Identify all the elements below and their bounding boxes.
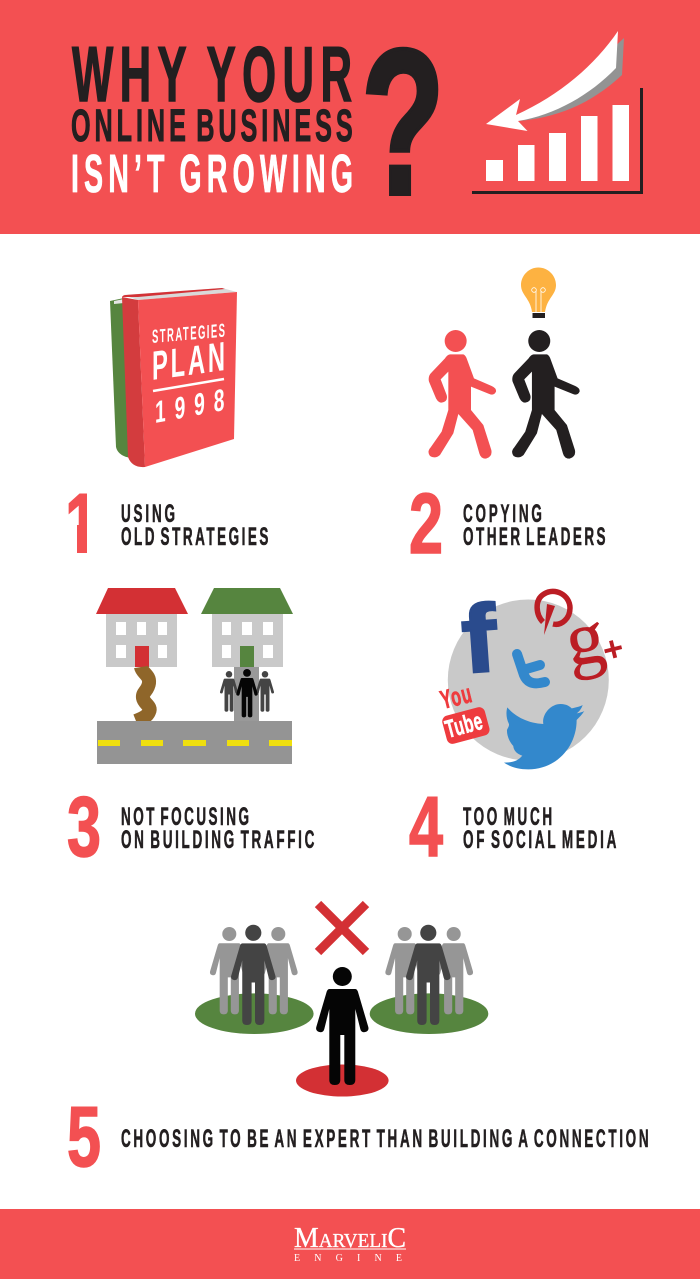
label 3 — [121, 804, 314, 854]
title: ISN’T GROWING — [71, 145, 353, 204]
icon: google plus: + — [599, 628, 628, 671]
left green group — [195, 925, 314, 1034]
icon: twitter bird — [504, 704, 584, 769]
brown winding path — [136, 667, 150, 721]
panel: item 2 copying leaders — [409, 268, 606, 571]
label 2 — [463, 501, 606, 551]
number 1: 1 — [65, 476, 99, 571]
label 1: USING — [121, 501, 175, 528]
lone expert on red disc — [296, 967, 389, 1096]
icon: tumblr t — [517, 654, 545, 683]
question mark: ? — [361, 6, 445, 239]
icon: google plus: g — [560, 594, 610, 683]
grey circle — [448, 600, 609, 760]
icon: red cross — [318, 904, 366, 952]
icon: old strategies book — [110, 288, 237, 467]
label 4: OF SOCIAL MEDIA — [463, 827, 616, 854]
icon: youtube: Tube — [442, 707, 485, 744]
icon: old strategies book: PLAN — [152, 335, 225, 390]
icon: black walking figure — [512, 330, 580, 459]
number 1 — [68, 494, 87, 553]
panel: item 5 expert vs connection — [67, 904, 649, 1184]
number 2: 2 — [409, 476, 443, 571]
icon: old strategies book: 1998 — [155, 384, 224, 430]
panel: item 3 traffic — [67, 588, 314, 874]
number 5: 5 — [67, 1089, 101, 1184]
road — [97, 721, 292, 764]
right green group — [370, 925, 488, 1034]
people on the path — [220, 669, 274, 717]
label 3: ON BUILDING TRAFFIC — [121, 827, 314, 854]
label 1: OLD STRATEGIES — [121, 524, 268, 551]
title: ONLINE BUSINESS — [71, 100, 353, 151]
number 3: 3 — [67, 779, 101, 874]
icon: youtube — [437, 678, 491, 745]
icon: declining bar chart with arrow — [472, 31, 642, 192]
label 1 — [121, 501, 268, 551]
logo: Marvelic Engine: ENGINE — [294, 1253, 402, 1264]
icon: light bulb — [521, 268, 556, 318]
panel: item 4 social media — [409, 585, 628, 874]
panel: item 1 old strategies — [65, 288, 268, 571]
label 3: NOT FOCUSING — [121, 804, 249, 831]
icon: old strategies book: STRATEGIES — [152, 320, 225, 348]
icon: green house — [201, 588, 293, 721]
title — [71, 32, 353, 204]
icon: pinterest — [537, 591, 570, 635]
logo: Marvelic Engine: MARVELIC — [294, 1222, 406, 1254]
label 2: COPYING — [463, 501, 542, 528]
label 4 — [463, 804, 616, 854]
icon: red house — [96, 588, 188, 667]
footer band — [0, 1209, 700, 1279]
label 2: OTHER LEADERS — [463, 524, 606, 551]
label 4: TOO MUCH — [463, 804, 552, 831]
icon: facebook: f — [458, 585, 501, 694]
icon: youtube: You — [437, 678, 475, 715]
title: WHY YOUR — [72, 32, 352, 118]
label 5: CHOOSING TO BE AN EXPERT THAN BUILDING A CONNECTION — [121, 1126, 649, 1153]
icon: red walking figure — [428, 330, 496, 459]
header band — [0, 0, 700, 234]
number 4: 4 — [409, 779, 443, 874]
